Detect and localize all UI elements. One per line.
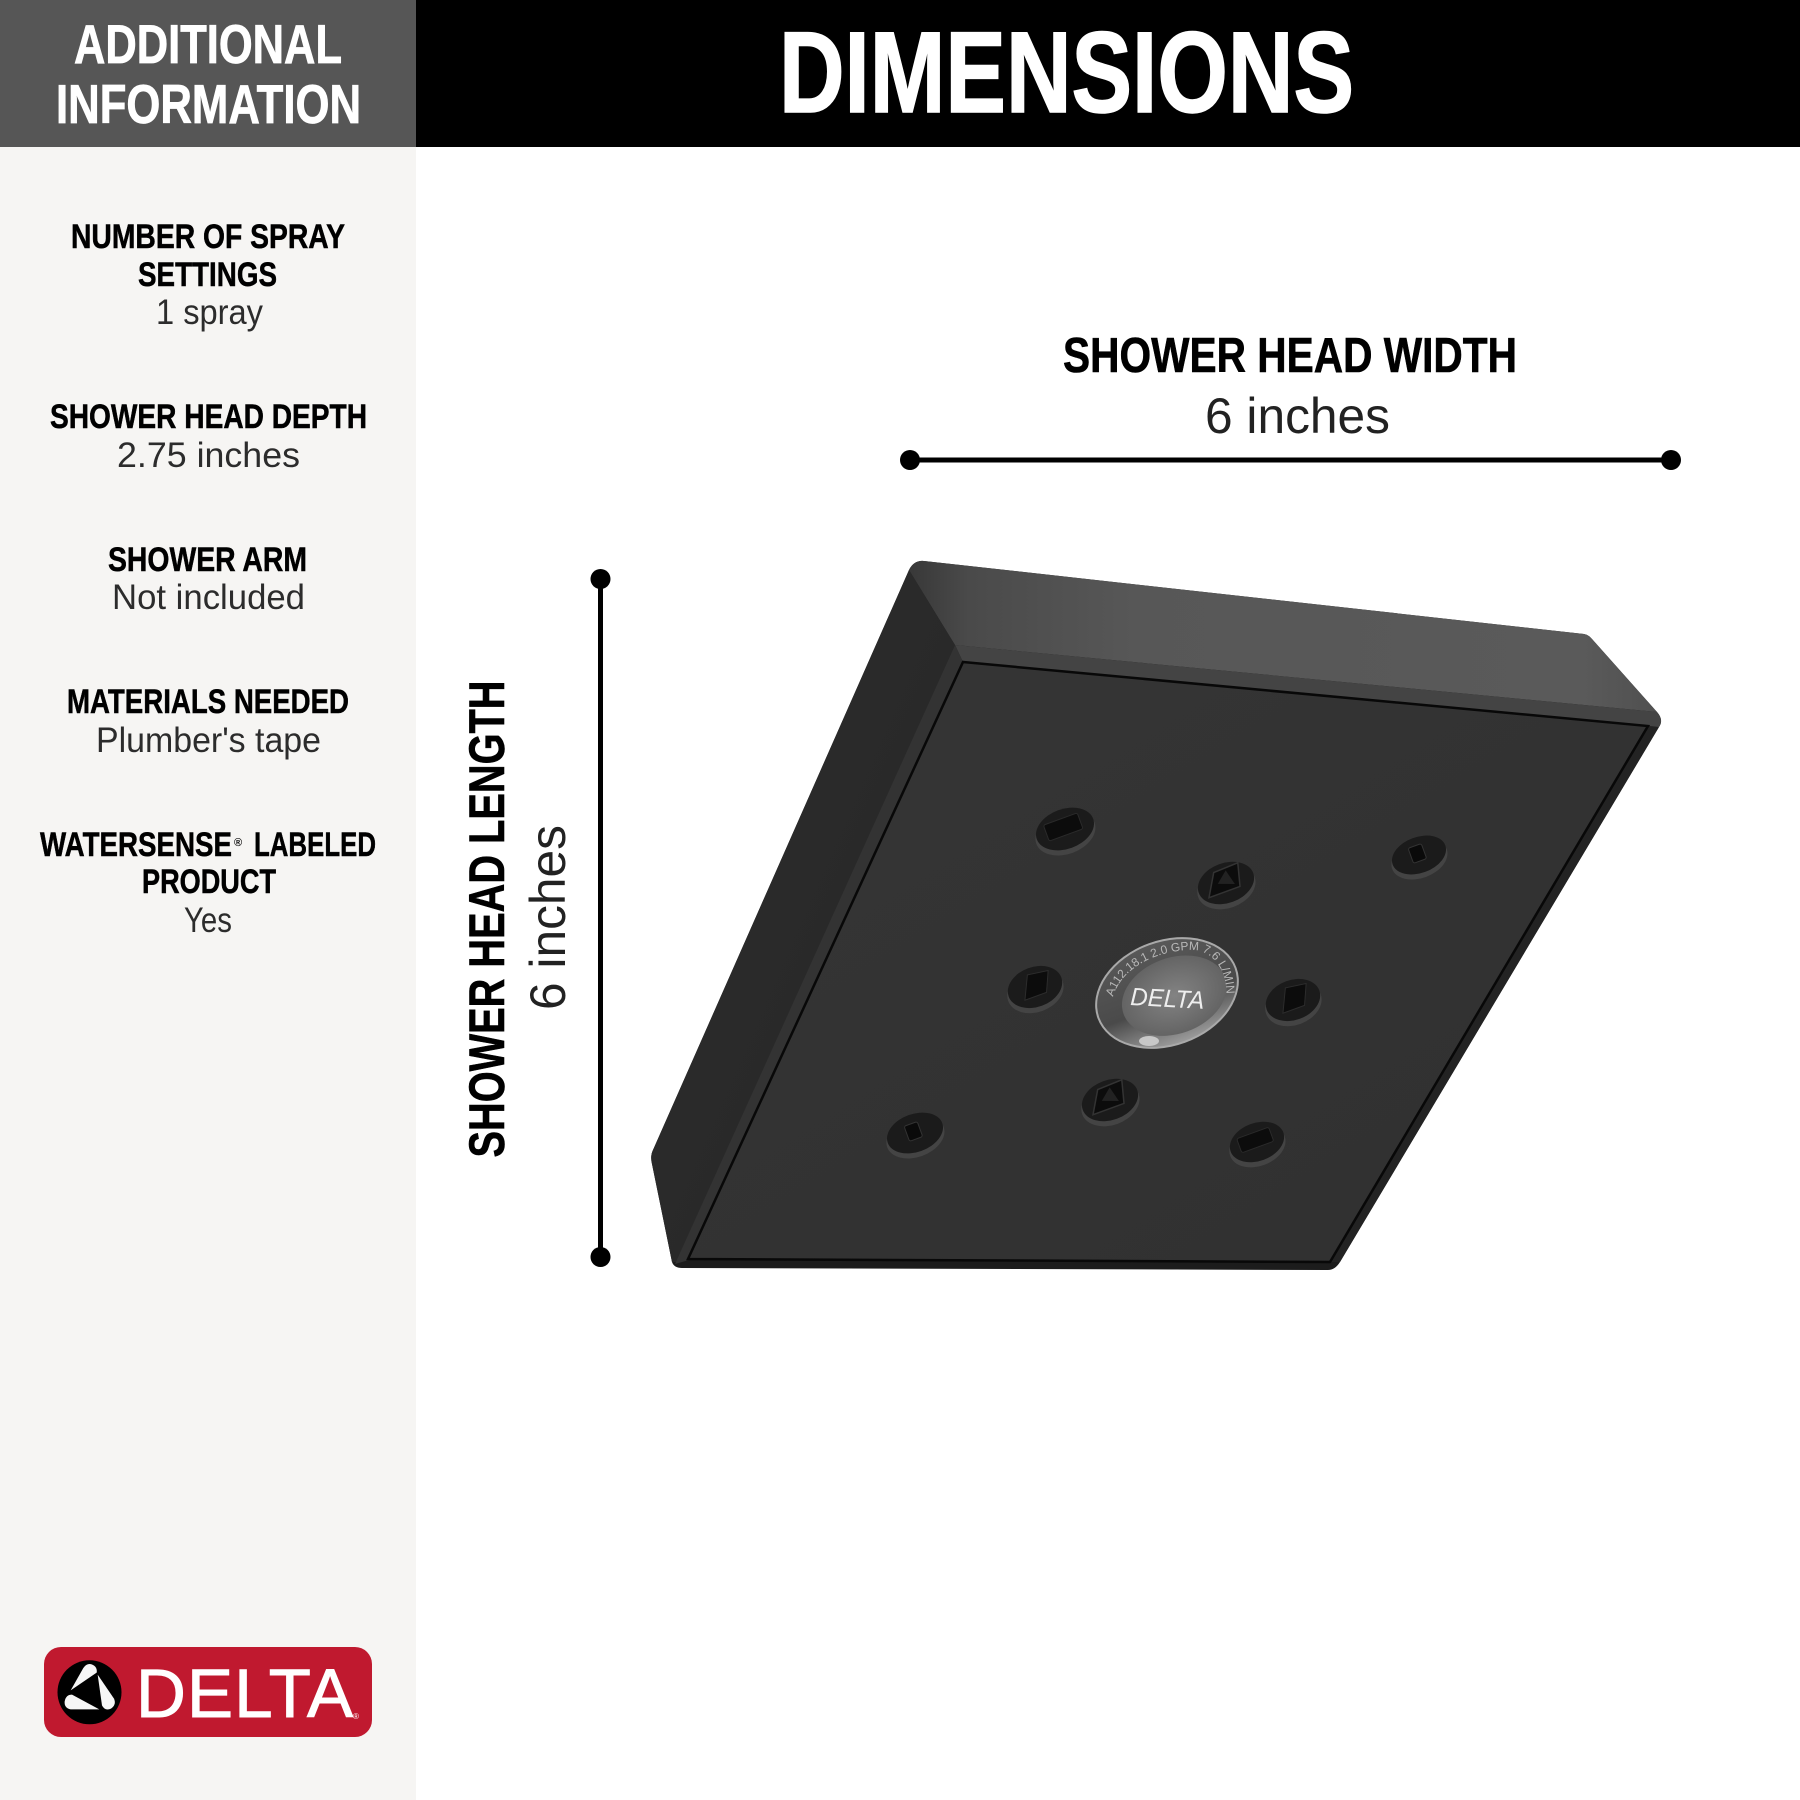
spec: shower head depth: [50, 398, 367, 475]
spec: watersense labeled product: WATERSENSE: [40, 826, 232, 864]
logo: Delta: ®: [353, 1712, 359, 1721]
spec: shower arm: [108, 541, 307, 617]
center badge: [1095, 937, 1239, 1049]
spec: materials needed: [67, 683, 349, 760]
spec: shower arm: Not included: [112, 578, 305, 617]
spec: shower arm: SHOWER ARM: [108, 541, 307, 579]
spec: watersense labeled product: [40, 826, 376, 940]
header: additional information: [0, 0, 416, 147]
spec: shower head depth: SHOWER HEAD DEPTH: [50, 398, 367, 436]
spec: number of spray settings: 1 spray: [156, 293, 263, 332]
right rim band: [1330, 727, 1659, 1262]
spec: number of spray settings: SETTINGS: [138, 256, 277, 294]
dimension: shower head width: [900, 329, 1681, 470]
nozzle 2: [1190, 854, 1262, 917]
header: dimensions title: [416, 0, 1800, 147]
header: additional information: ADDITIONAL: [74, 13, 342, 75]
left rim band: [675, 645, 963, 1264]
arrow: length line: [590, 569, 610, 1267]
top bevel: [909, 561, 1657, 712]
dimension: shower head width: SHOWER HEAD WIDTH: [1063, 329, 1517, 383]
nozzle 3: [1385, 829, 1453, 887]
spec: number of spray settings: NUMBER OF SPRAY: [71, 218, 345, 256]
arrow: width line: [900, 450, 1681, 470]
spec: shower head depth: 2.75 inches: [117, 436, 300, 475]
nozzle 8: [1222, 1115, 1292, 1175]
spec: watersense labeled product: ®: [234, 837, 242, 849]
center badge: A112.18.1 2.0 GPM 7.6 L/MIN: [1106, 942, 1235, 997]
nozzle 7: [879, 1105, 950, 1166]
nozzle 4: [1000, 959, 1070, 1021]
nozzle 5: [1258, 972, 1328, 1034]
logo: Delta: [44, 1647, 372, 1737]
product: square shower head: [651, 560, 1662, 1270]
dimension: shower head length: 6 inches: [520, 825, 576, 1010]
spec list: [40, 218, 376, 940]
certification mark: [1139, 1036, 1159, 1046]
top rim band: [955, 645, 1661, 727]
nozzle 6: [1074, 1071, 1146, 1134]
face plate: [688, 662, 1648, 1262]
spec: watersense labeled product: LABELED: [254, 826, 376, 864]
spec: materials needed: Plumber's tape: [96, 721, 321, 760]
header: additional information: INFORMATION: [56, 73, 361, 135]
spec: number of spray settings: [71, 218, 345, 332]
panel: sidebar background: [0, 147, 416, 1800]
dimension: shower head length: SHOWER HEAD LENGTH: [459, 680, 515, 1158]
dimension: shower head length: [459, 569, 610, 1267]
left side: [651, 570, 955, 1262]
header: dimensions title: DIMENSIONS: [779, 9, 1354, 137]
spec: materials needed: MATERIALS NEEDED: [67, 683, 349, 721]
center badge: DELTA: [1130, 983, 1205, 1015]
dimension: shower head width: 6 inches: [1205, 388, 1390, 444]
logo: Delta: DELTA: [136, 1655, 353, 1732]
spec: watersense labeled product: PRODUCT: [142, 863, 276, 901]
outer body: [651, 561, 1661, 1270]
nozzle 1: [1028, 800, 1102, 863]
spec: watersense labeled product: Yes: [184, 901, 232, 940]
icon: Delta triangle mark: [58, 1660, 122, 1724]
